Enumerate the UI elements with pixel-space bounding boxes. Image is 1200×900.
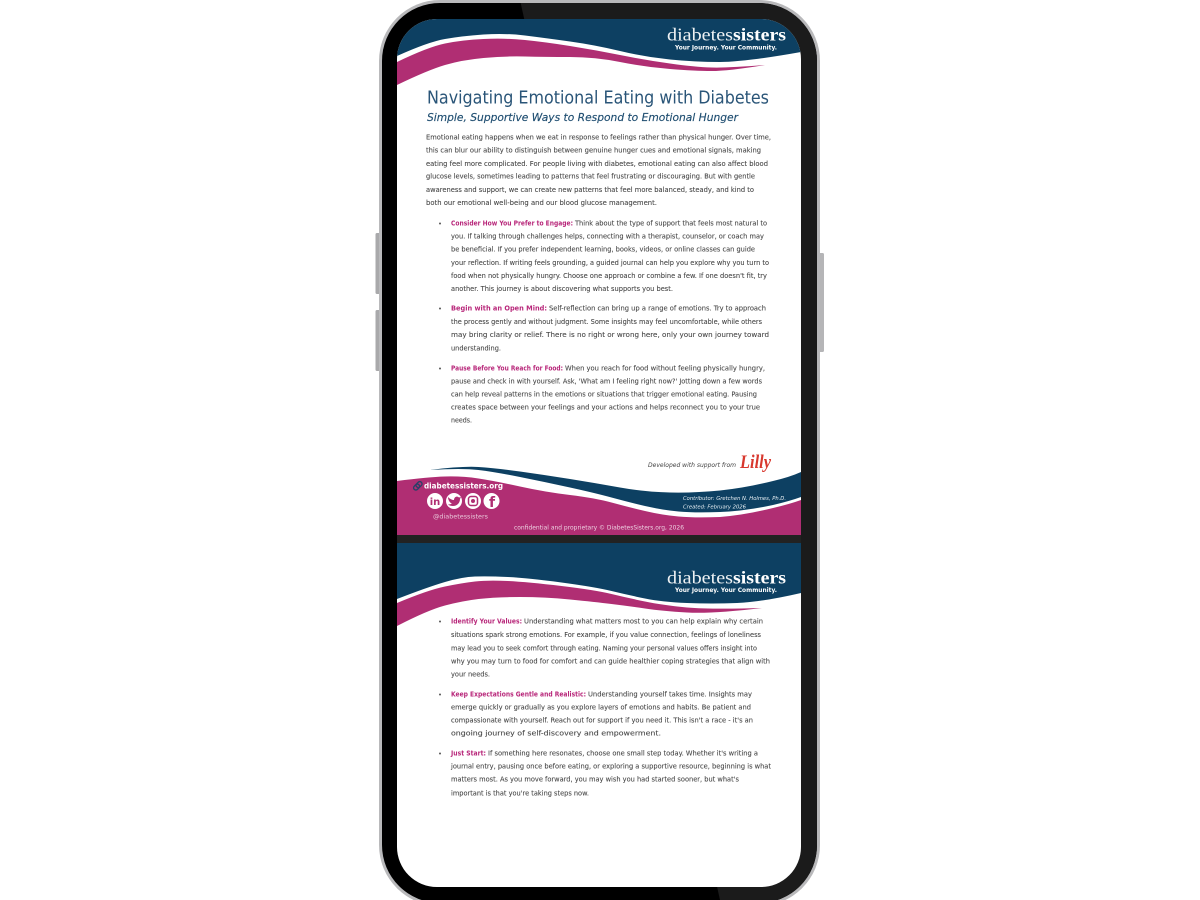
- logo page 1: [668, 28, 786, 51]
- header wave page 2: [397, 543, 801, 626]
- logo page 1: Your Journey. Your Community.: [674, 44, 777, 52]
- bullet: begin with an open mind: the process gently and without judgment. Some insights may feel uncomfortable, while others: [451, 318, 762, 326]
- bullet: keep expectations gentle and realistic: Understanding yourself takes time. Insights may: [588, 690, 752, 698]
- bullet: begin with an open mind: [439, 304, 769, 352]
- footer wave page 1: [397, 467, 801, 535]
- bullet: identify your values: Identify Your Values:: [451, 618, 522, 626]
- bullet: identify your values: may lead you to seek comfort through eating. Naming your personal values offers insight into: [451, 644, 757, 652]
- bullet: just start: journal entry, pausing once before eating, or exploring a supportive resource, beginning is what: [450, 762, 771, 770]
- subtitle: Simple, Supportive Ways to Respond to Emotional Hunger: [427, 111, 739, 124]
- website link: diabetessisters.org: [424, 482, 503, 490]
- bullet: just start: Just Start:: [450, 750, 486, 758]
- bullet: keep expectations gentle and realistic: [439, 690, 753, 738]
- bullet: keep expectations gentle and realistic: ongoing journey of self-discovery and empowerment.: [451, 730, 661, 738]
- bullet: pause before you reach for food: Pause Before You Reach for Food:: [451, 364, 563, 372]
- bullet: begin with an open mind: Begin with an Open Mind:: [451, 304, 547, 312]
- logo page 2: sisters: [733, 568, 786, 588]
- intro paragraph: awareness and support, we can create new patterns that feel more balanced, steady, and kind to: [426, 186, 754, 194]
- social icons: [427, 493, 500, 509]
- phone frame: [376, 0, 824, 900]
- social handle: @diabetessisters: [433, 514, 488, 520]
- icon: linkedin: in: [430, 497, 440, 508]
- bullet: pause before you reach for food: creates space between your feelings and your actions and helps reconnect you to your true: [451, 404, 760, 412]
- bullet: pause before you reach for food: pause and check in with yourself. Ask, 'What am I feeling right now?' Jotting down a few words: [451, 378, 762, 386]
- intro paragraph: glucose levels, sometimes leading to patterns that feel frustrating or discouraging. But with gentle: [426, 172, 755, 180]
- bullet: identify your values: your needs.: [451, 670, 490, 678]
- bullet: begin with an open mind: Self-reflection can bring up a range of emotions. Try to approach: [549, 304, 766, 312]
- logo page 1: sisters: [733, 24, 786, 44]
- intro paragraph: [426, 134, 771, 207]
- sponsor credit: Lilly: [739, 452, 771, 473]
- bullet: consider how you prefer to engage: another. This journey is about discovering what supports you best.: [451, 285, 673, 293]
- intro paragraph: both our emotional well-being and our blood glucose management.: [426, 199, 657, 207]
- confidentiality notice: confidential and proprietary © DiabetesSisters.org, 2026: [514, 524, 684, 532]
- bullet: pause before you reach for food: [439, 364, 765, 424]
- bullet: keep expectations gentle and realistic: emerge quickly or gradually as you explore layers of emotions and habits. Be patient and: [451, 704, 751, 712]
- bullet: consider how you prefer to engage: your reflection. If writing feels grounding, a guided journal can help you explore why you turn to: [451, 259, 769, 267]
- icon: instagram: [465, 493, 481, 509]
- phone mockup infographic: [376, 0, 824, 900]
- bullet: consider how you prefer to engage: you. If talking through challenges helps, connecting with a therapist, counselor, or coach may: [451, 232, 764, 240]
- bullet: pause before you reach for food: When you reach for food without feeling physically hungry,: [565, 364, 765, 372]
- logo page 2: Your Journey. Your Community.: [674, 587, 777, 594]
- contributor note: Created: February 2026: [683, 504, 746, 510]
- bullet: identify your values: [439, 618, 770, 678]
- bullet: consider how you prefer to engage: [439, 220, 769, 293]
- logo page 2: [668, 570, 786, 594]
- bullet: keep expectations gentle and realistic: Keep Expectations Gentle and Realistic:: [451, 690, 586, 698]
- bullet: consider how you prefer to engage: Think about the type of support that feels most natural to: [574, 220, 767, 228]
- bullet: just start: [439, 750, 771, 798]
- header wave page 1: [397, 19, 801, 85]
- bullet: consider how you prefer to engage: food when not physically hungry. Choose one approach or combine a few. If one doesn't fit, try: [451, 272, 767, 280]
- logo page 1: diabetes: [667, 24, 733, 44]
- logo page 2: diabetes: [667, 568, 733, 588]
- bullet: identify your values: why you may turn to food for comfort and can guide healthier coping strategies that align with: [451, 658, 770, 666]
- bullet: identify your values: situations spark strong emotions. For example, if you value connection, feelings of loneliness: [451, 631, 761, 639]
- title: Navigating Emotional Eating with Diabetes: [427, 88, 769, 108]
- bullet: keep expectations gentle and realistic: compassionate with yourself. Reach out for support if you need it. This isn't a race - it's an: [451, 716, 753, 724]
- bullet: just start: important is that you're taking steps now.: [451, 790, 589, 798]
- contributor note: [683, 496, 786, 510]
- bullet: just start: If something here resonates, choose one small step today. Whether it's writing a: [488, 750, 758, 758]
- bullet: identify your values: Understanding what matters most to you can help explain why certain: [524, 618, 763, 626]
- intro paragraph: eating feel more complicated. For people living with diabetes, emotional eating can also affect blood: [426, 160, 768, 168]
- bullet: pause before you reach for food: needs.: [451, 416, 472, 424]
- bullet: consider how you prefer to engage: Consider How You Prefer to Engage:: [451, 220, 573, 228]
- screen content: [397, 19, 801, 798]
- sponsor credit: Developed with support from: [648, 462, 736, 469]
- contributor note: Contributor: Gretchen N. Holmes, Ph.D.: [683, 496, 786, 502]
- bullet: just start: matters most. As you move forward, you may wish you had started sooner, but what's: [451, 776, 739, 784]
- bullet: begin with an open mind: may bring clarity or relief. There is no right or wrong here, only your own journey toward: [451, 331, 769, 339]
- bullet: pause before you reach for food: can help reveal patterns in the emotions or situations that trigger emotional eating. Pausing: [451, 390, 757, 398]
- intro paragraph: Emotional eating happens when we eat in response to feelings rather than physical hunger. Over time,: [426, 134, 771, 142]
- icon: facebook: f: [489, 495, 496, 511]
- page divider: [397, 535, 801, 543]
- bullet: begin with an open mind: understanding.: [451, 344, 501, 352]
- intro paragraph: this can blur our ability to distinguish between genuine hunger cues and emotional signals, making: [426, 146, 761, 154]
- sponsor credit: [648, 454, 772, 472]
- icon: twitter: [446, 493, 462, 509]
- bullet: consider how you prefer to engage: be beneficial. If you prefer independent learning, books, videos, or online classes can guide: [451, 246, 755, 254]
